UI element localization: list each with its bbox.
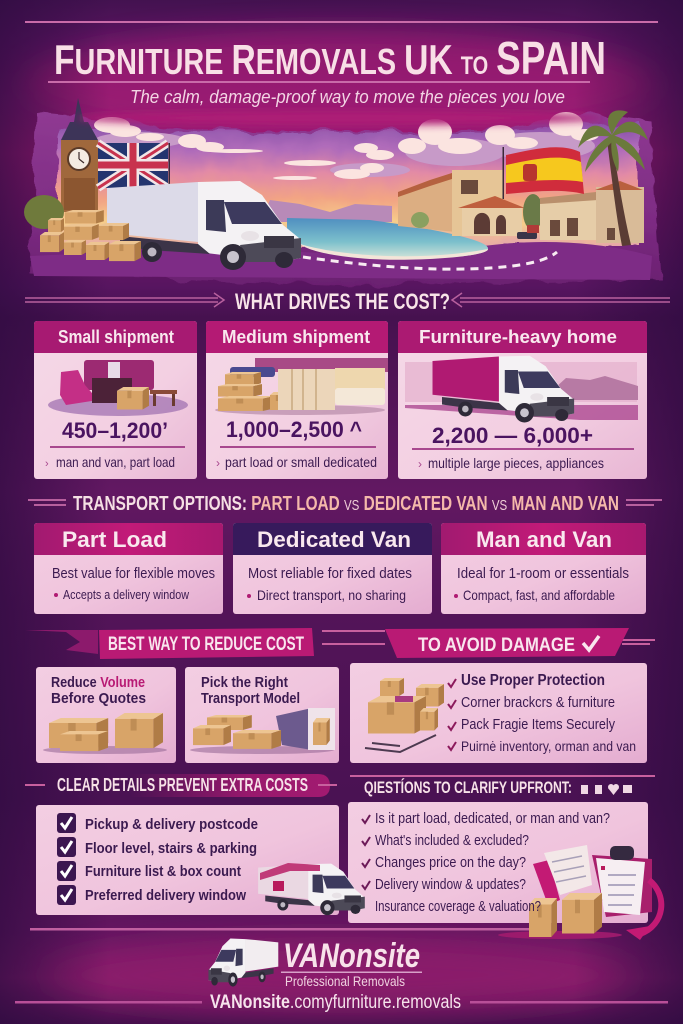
question: insurance coverage: Insurance coverage & valuation? <box>375 898 541 915</box>
panel: man and van: Ideal for 1-room or essentials <box>457 565 629 582</box>
panel: to avoid damage checklist: Pack Fragie Items Securely <box>461 716 615 733</box>
title: FURNITURE REMOVALS UK TO SPAIN <box>54 32 606 84</box>
icon: logo van <box>208 939 278 987</box>
panel: questions list: Changes price on the day? <box>375 854 526 871</box>
panel: pick the right transport model: Transport Model <box>201 690 300 707</box>
price: 1,000–2,500 ^ <box>226 417 362 442</box>
header: title and subtitle <box>25 21 658 125</box>
panel: dedicated van <box>233 523 432 614</box>
panel: furniture-heavy home <box>398 321 647 479</box>
palm tree <box>578 110 648 246</box>
panel: man and van: Man and Van <box>476 527 612 552</box>
panel: man and van: Compact, fast, and affordable <box>463 587 615 603</box>
dashed route <box>303 252 557 269</box>
panel: dedicated van: Most reliable for fixed dates <box>248 565 412 582</box>
panel: medium shipment: › <box>216 456 220 470</box>
panel: small shipment <box>34 321 197 479</box>
section heading: what drives the cost <box>25 289 670 314</box>
sea <box>287 218 488 258</box>
panel: reduce volume: Before Quotes <box>51 690 146 707</box>
panel: medium shipment: part load or small dedicated <box>225 454 377 470</box>
ribbon: to avoid damage <box>385 628 655 658</box>
panel: furniture-heavy home: multiple large pieces, appliances <box>428 455 604 471</box>
icon: magenta van scene <box>405 356 638 422</box>
icon: boxes and van rear <box>190 708 335 754</box>
panel: to avoid damage checklist <box>350 663 647 763</box>
checkbox list: Pickup & delivery postcode <box>85 816 258 833</box>
ribbon: to avoid damage: TO AVOID DAMAGE <box>418 635 575 656</box>
icon: wrapped box pile with trolley <box>365 678 444 752</box>
panel: dedicated van: Dedicated Van <box>257 527 411 552</box>
panel: reduce volume <box>36 667 176 763</box>
checkbox list: Preferred delivery window <box>85 887 246 904</box>
trees behind boxes <box>24 195 64 229</box>
panel: pick the right transport model <box>185 667 339 763</box>
heading: questions to clarify upfront: QIESTÍONS TO CLARIFY UPFRONT: <box>364 778 572 797</box>
Spanish flag <box>502 147 584 199</box>
icon: cardboard boxes <box>43 713 167 754</box>
panel: part load: Part Load <box>62 527 167 552</box>
Big Ben <box>61 98 98 212</box>
panel: medium shipment <box>206 321 388 479</box>
panel: questions list: Is it part load, dedicated, or man and van? <box>375 810 610 827</box>
UK flag <box>98 143 170 191</box>
panel: pick the right transport model: Pick the Right <box>201 674 288 691</box>
subtitle: The calm, damage-proof way to move the pieces you love <box>130 87 565 107</box>
panel: man and van <box>441 523 646 614</box>
panel: details checklist <box>36 805 339 915</box>
distant hills <box>262 200 392 222</box>
price: 450–1,200’ <box>62 418 168 443</box>
panel: reduce volume: Reduce Volume <box>51 674 145 691</box>
icons: small clipboard, heart, box <box>581 784 632 795</box>
footer divider <box>30 928 550 930</box>
icon: furniture pile <box>48 360 188 416</box>
panel: part load: Accepts a delivery window <box>63 587 189 602</box>
logo: VANonsite: Professional Removals <box>285 973 405 989</box>
logo: VANonsite: VANonsite <box>283 937 420 975</box>
checkbox list: Floor level, stairs & parking <box>85 840 257 857</box>
icon: boxes and crates <box>215 358 388 415</box>
panel: part load <box>34 523 223 614</box>
website address: VANonsite.comyfurniture.removals <box>210 992 461 1013</box>
road <box>30 242 652 280</box>
panel: to avoid damage checklist: Use Proper Protection <box>461 672 605 689</box>
ribbon: best way to reduce cost <box>25 628 385 659</box>
logo: VANonsite <box>208 937 422 989</box>
section heading: transport options: TRANSPORT OPTIONS: PART LOAD VS DEDICATED VAN VS MAN AND VAN <box>73 493 619 515</box>
panel: small shipment: › <box>45 458 49 470</box>
price: 2,200 — 6,000+ <box>432 423 593 448</box>
checkbox list: Furniture list & box count <box>85 863 241 880</box>
sky <box>58 122 640 246</box>
panel: to avoid damage checklist: Corner brackcrs & furniture <box>461 694 615 711</box>
panel: questions list: What's included & excluded? <box>375 832 529 849</box>
panel: medium shipment: Medium shipment <box>222 327 370 347</box>
clouds <box>94 112 599 180</box>
panel: to avoid damage checklist: Puirnė inventory, orman and van <box>461 738 636 754</box>
stacked moving boxes <box>40 210 141 261</box>
panel: part load: Best value for flexible moves <box>52 565 215 582</box>
checkbox list <box>57 813 258 905</box>
hero illustration: UK to Spain journey <box>24 98 660 286</box>
illustration: clipboard, paperwork and boxes <box>498 845 661 940</box>
panel: furniture-heavy home: › <box>418 457 422 471</box>
Spanish village <box>398 170 644 243</box>
section heading: what drives the cost: WHAT DRIVES THE COST? <box>235 289 450 314</box>
panel: small shipment: man and van, part load <box>56 454 175 470</box>
ribbon: best way to reduce cost: BEST WAY TO REDUCE COST <box>108 634 304 655</box>
heading: clear details prevent extra costs <box>25 774 337 797</box>
panel: furniture-heavy home: Furniture-heavy home <box>419 327 617 347</box>
small delivery van <box>258 863 365 915</box>
delivery van <box>107 181 301 270</box>
panel: dedicated van: Direct transport, no sharing <box>257 587 406 603</box>
heading: clear details prevent extra costs: CLEAR DETAILS PREVENT EXTRA COSTS <box>57 775 308 795</box>
panel: questions list: Delivery window & updates? <box>375 876 526 893</box>
panel: questions list <box>348 802 648 923</box>
panel: small shipment: Small shipment <box>58 327 174 347</box>
